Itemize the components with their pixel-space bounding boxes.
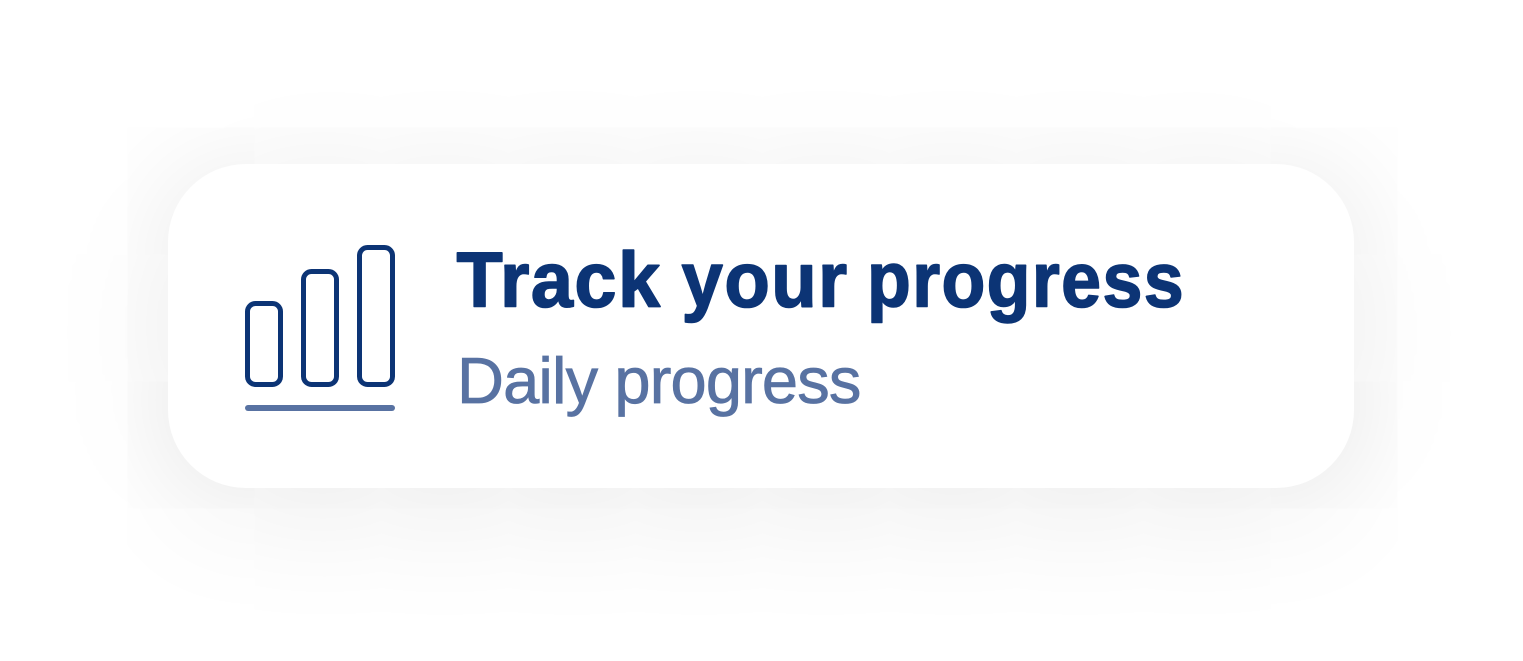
heading: title: your	[682, 236, 848, 324]
heading: title: progress	[867, 236, 1185, 324]
text block: subtitle: Daily progress	[457, 344, 861, 417]
heading: title: Track	[456, 236, 662, 324]
panel: card	[168, 164, 1354, 488]
icon: bar chart	[245, 245, 395, 411]
